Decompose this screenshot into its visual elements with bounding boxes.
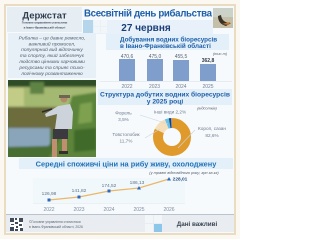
copyright text	[29, 220, 83, 229]
donut labels: (відсотків)	[197, 106, 218, 110]
line chart: average prices: 2023	[73, 207, 85, 213]
intro text panel: та спорту, який забезпечує	[20, 52, 85, 59]
QR code	[10, 218, 23, 231]
intro text panel: важливий промисел,	[29, 40, 75, 48]
bar chart: catch by year	[100, 54, 232, 90]
intro text panel: ресурсами та сприяє психо-	[18, 66, 85, 71]
line chart: average prices: 2026	[163, 207, 175, 213]
icon: fish photo	[213, 8, 233, 28]
line chart: average prices: 186,13	[130, 180, 145, 186]
bar chart: catch by year: 2025	[202, 84, 214, 90]
photo: angler by the river	[6, 78, 98, 159]
header: organisation block	[7, 7, 82, 32]
copyright text: в Івано-Франківській області, 2026	[29, 225, 83, 229]
line chart: average prices: 228,01	[173, 176, 188, 182]
date band	[83, 20, 213, 34]
bar chart: catch by year: 2024	[175, 84, 187, 90]
date band: 27 червня	[121, 23, 171, 34]
decorative squares	[145, 215, 162, 232]
section heading: catch volume	[106, 34, 229, 50]
donut chart: catch structure	[158, 123, 186, 151]
line chart: average prices	[33, 176, 188, 213]
line chart: average prices: 2024	[103, 207, 115, 213]
title: Всесвітній день рибальства	[84, 8, 213, 20]
intro text panel: людство цінними харчовими	[18, 59, 85, 65]
section heading: catch volume: Добування водних біоресурсів	[120, 36, 217, 44]
header: organisation block: Головне управління статистики	[22, 20, 68, 24]
data matter label: Дані важливі	[177, 220, 218, 228]
donut labels: 82,6%	[205, 133, 219, 138]
section heading: catch structure: Структура добутих водних біоресурсів	[100, 90, 230, 98]
line chart: average prices: 2022	[43, 207, 55, 213]
section heading: catch structure	[98, 89, 232, 106]
bar chart: catch by year: 2022	[121, 84, 133, 90]
donut labels	[112, 106, 226, 148]
line chart: average prices: 174,52	[102, 183, 117, 189]
intro text panel: популярний вид відпочинку	[21, 46, 83, 53]
donut labels: Інші види 2,2%	[154, 110, 186, 114]
bar chart: catch by year: 362,8	[202, 58, 214, 64]
section heading: catch structure: у 2025 році	[147, 98, 183, 106]
intro text panel: Рибалка – це давнє ремесло,	[19, 36, 85, 42]
copyright text: ©Головне управління статистики	[29, 220, 81, 224]
bar chart: catch by year: 470,6	[121, 54, 133, 60]
unit label: (тис.т)	[213, 51, 228, 56]
bar chart: catch by year: 455,5	[175, 54, 187, 60]
line chart: average prices: 2025	[133, 207, 145, 213]
bar chart: catch by year: 475,0	[149, 54, 161, 60]
angler	[42, 95, 73, 157]
line chart: average prices: 141,82	[72, 188, 87, 194]
price note: (у травні відповідного року; грн за кг)	[149, 170, 219, 175]
donut labels: Короп, сазан	[198, 126, 226, 131]
section heading: average prices	[19, 158, 233, 169]
donut labels: Форель	[115, 110, 132, 116]
section heading: catch volume: в Івано-Франківській області	[120, 42, 211, 50]
header: organisation block: в Івано-Франківській області	[24, 26, 66, 30]
intro text panel	[8, 33, 96, 78]
donut labels: 11,7%	[120, 138, 132, 144]
donut labels: Товстолобик	[112, 132, 141, 137]
line chart: average prices: 126,98	[42, 191, 57, 197]
intro text panel: логічному розвантаженню	[20, 71, 83, 77]
header: organisation block: Держстат	[22, 10, 67, 22]
bar chart: catch by year: 2023	[149, 84, 160, 90]
donut labels: 3,5%	[118, 117, 129, 122]
footer bar	[6, 214, 234, 232]
section heading: average prices: Середні споживчі ціни на рибу живу, охолоджену	[36, 160, 217, 168]
